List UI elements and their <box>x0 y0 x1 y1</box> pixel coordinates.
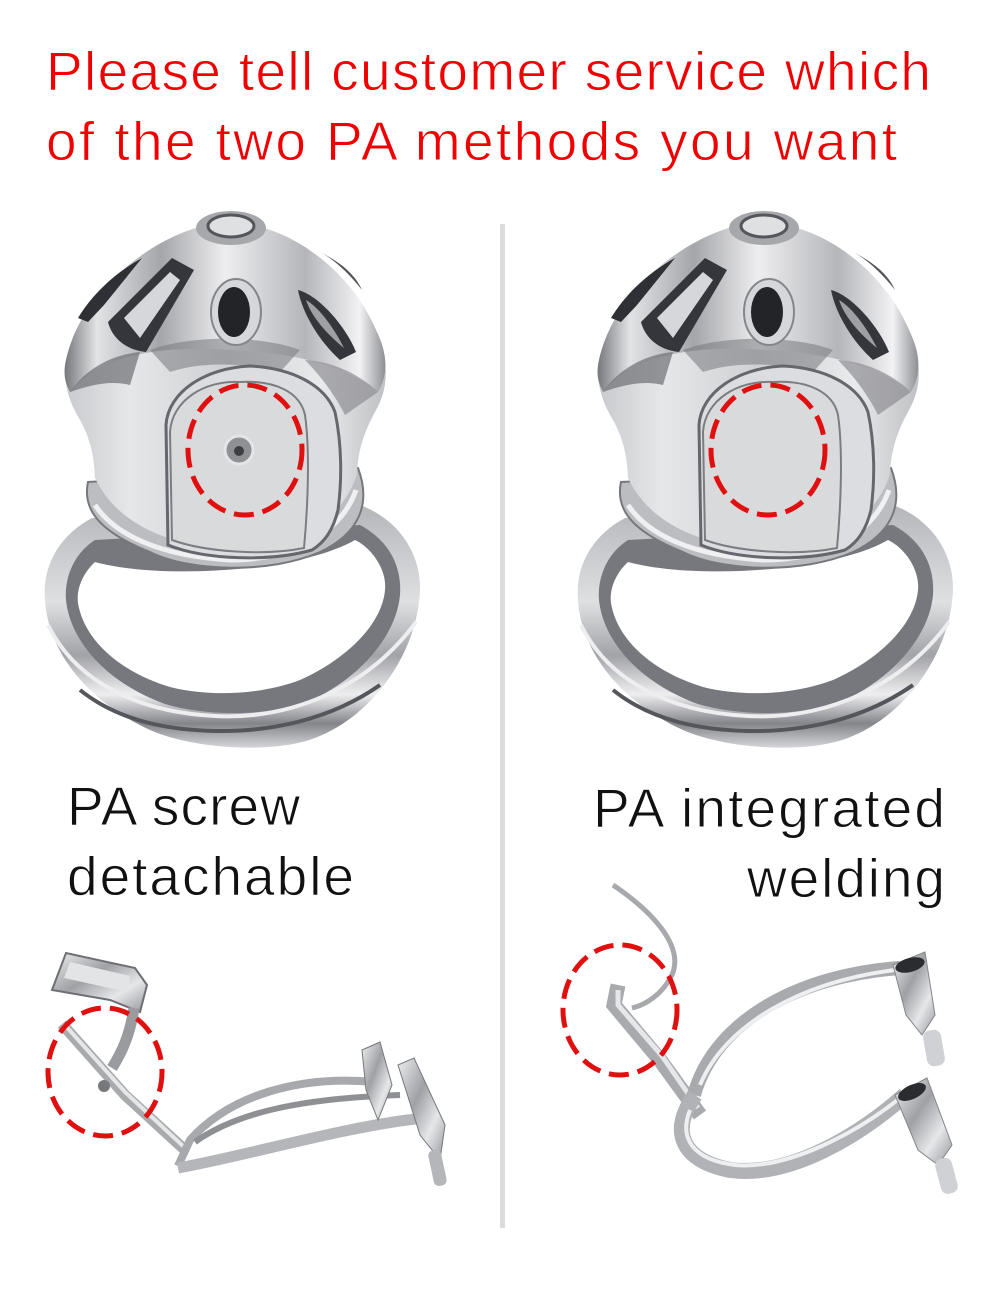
panel: detachable frame photo <box>48 953 448 1187</box>
center divider <box>500 224 505 1228</box>
label: PA screw detachable: PA screw <box>67 775 300 837</box>
panel: integrated frame photo <box>563 885 959 1195</box>
title <box>46 40 931 172</box>
icon: screw <box>225 436 253 464</box>
callout: screw circle <box>188 385 302 515</box>
callout: detachable circle <box>48 1008 162 1136</box>
panel: PA integrated product photo <box>578 211 953 748</box>
callout: integrated weld circle <box>563 945 677 1075</box>
label: PA screw detachable: detachable <box>67 845 354 907</box>
label: PA screw detachable <box>67 775 354 907</box>
panel: PA screw product photo <box>45 211 420 748</box>
callout: integrated circle <box>711 385 825 515</box>
label: PA integrated welding <box>593 777 945 909</box>
label: PA integrated welding: welding <box>746 847 945 909</box>
label: PA integrated welding: PA integrated <box>593 777 945 839</box>
title: Please tell customer service which <box>46 40 931 102</box>
title: of the two PA methods you want <box>46 110 897 172</box>
